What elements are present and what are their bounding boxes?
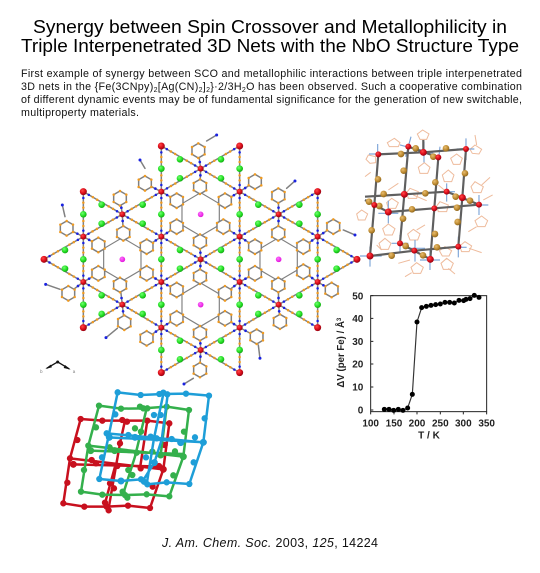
summary text: First example of synergy between SCO and metallophilic interactions between triple interpenetrated [21, 68, 522, 80]
chart tick labels: 50 [352, 291, 364, 302]
chart tick labels: 300 [455, 418, 472, 429]
chart tick labels: 250 [432, 418, 449, 429]
summary text: 2 [206, 87, 210, 94]
summary text: 2 [154, 87, 158, 94]
title: Triple Interpenetrated 3D Nets with the NbO Structure Type [21, 35, 519, 56]
three interpenetrated NbO nets [61, 390, 212, 513]
data line and points [382, 293, 481, 413]
summary text: 2 [199, 87, 203, 94]
summary text [21, 68, 522, 119]
icon: axis compass [40, 360, 76, 374]
x axis title: T / K [418, 431, 441, 442]
summary text: 2 [242, 87, 246, 94]
summary text: multiproperty materials. [21, 107, 139, 119]
crystal packing view with iron and silver atoms [357, 130, 493, 277]
chart tick labels: 20 [352, 360, 364, 371]
chart tick labels [352, 291, 495, 429]
chart tick labels: 30 [352, 337, 364, 348]
blue net [97, 390, 212, 487]
crystal lattice diagram viewed along the pores [40, 133, 360, 385]
chart tick labels: 10 [352, 383, 364, 394]
chart tick labels: 100 [362, 418, 379, 429]
summary text: O has been observed. Such a cooperative combination [246, 81, 522, 93]
chart tick labels: 200 [409, 418, 426, 429]
chart tick labels: 150 [386, 418, 403, 429]
chart axes [371, 296, 487, 414]
title [21, 16, 519, 56]
citation: J. Am. Chem. Soc. 2003, 125, 14224 [161, 536, 378, 550]
y axis title: 3 [337, 317, 343, 321]
summary text: ] [203, 81, 206, 93]
summary text: 3D nets in the {Fe(3CNpy) [21, 81, 153, 93]
icon: axis compass: b [40, 369, 43, 374]
summary text: [Ag(CN) [158, 81, 198, 93]
summary text: }·2/3H [210, 81, 242, 93]
y axis title: ΔV (per Fe) / Å [336, 321, 347, 388]
chart tick labels: 40 [352, 314, 364, 325]
title: Synergy between Spin Crossover and Metallophilicity in [33, 16, 507, 37]
chart tick labels: 350 [478, 418, 495, 429]
chart tick labels: 0 [358, 406, 364, 417]
summary text: of different dynamic events may be of fundamental significance for the generation of new switchable, [21, 94, 522, 106]
icon: axis compass: a [73, 369, 76, 374]
line chart: volume change versus temperature [336, 291, 495, 442]
red net [61, 416, 172, 513]
green net [78, 403, 192, 500]
